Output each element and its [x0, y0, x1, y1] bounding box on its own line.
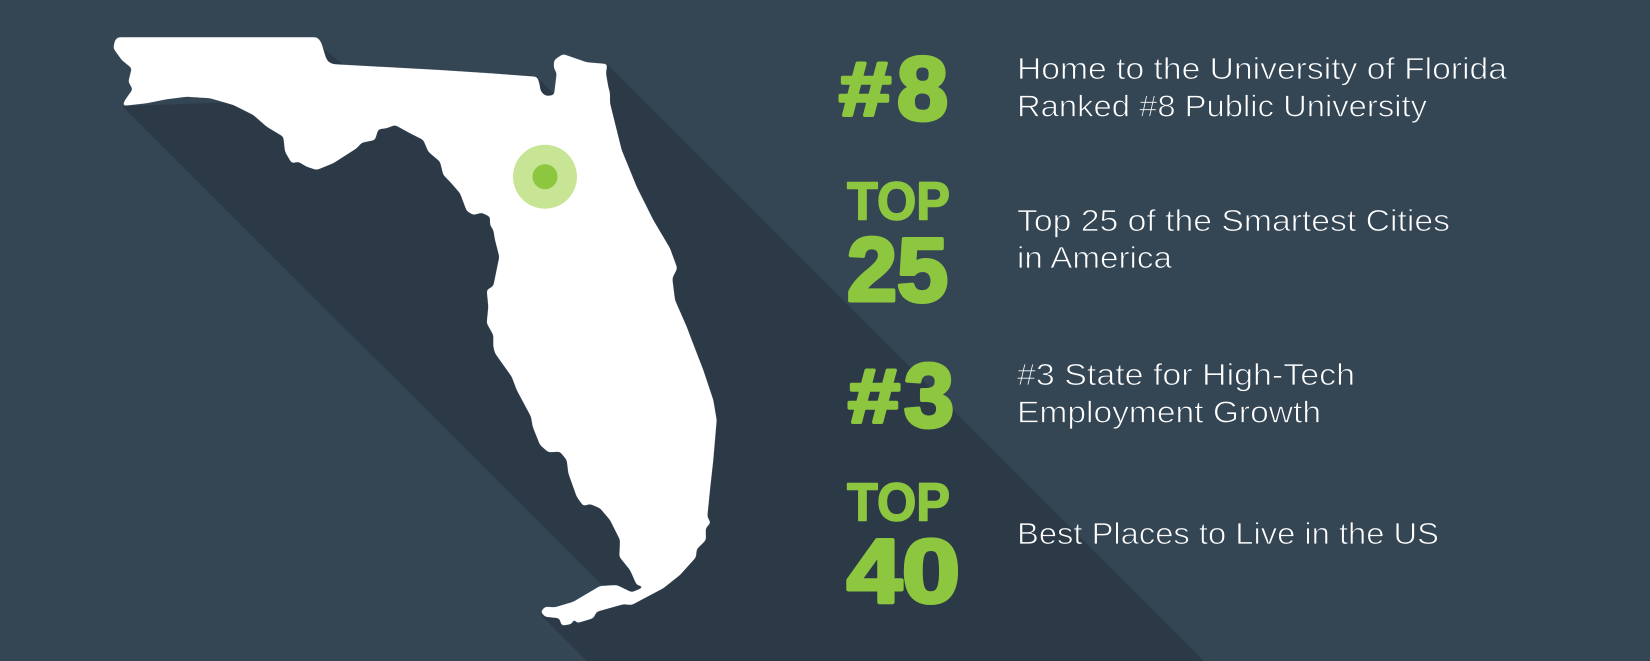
stat: #8: #: [839, 47, 891, 132]
text: Smartest Cities: Top 25 of the Smartest Cities: [1017, 203, 1450, 238]
stat: Top 25: 2: [847, 220, 897, 320]
text: High-Tech Employment: Employment Growth: [1017, 395, 1321, 430]
text: High-Tech Employment: [1017, 357, 1355, 430]
stat: Top 40: 0: [902, 522, 960, 622]
text: Smartest Cities: [1017, 203, 1450, 275]
stat: #3: [848, 346, 954, 446]
stat: Top 25: [847, 172, 950, 321]
stat: Top 40: 4: [847, 522, 902, 622]
long diagonal shadow of the map: [122, 48, 1204, 661]
stat: #3: #: [848, 354, 900, 439]
text: University of Florida: Home to the University of Florida: [1017, 51, 1508, 86]
stat: #3: 3: [904, 346, 954, 446]
text: University of Florida: [1017, 51, 1508, 124]
location marker: Gainesville: [513, 145, 577, 209]
stat: Top 25: TOP: [847, 172, 950, 232]
text: University of Florida: Ranked #8 Public University: [1017, 89, 1428, 124]
stat: #8: 8: [897, 40, 948, 140]
stat: Top 40: TOP: [847, 472, 950, 532]
text: High-Tech Employment: #3 State for High-Tech: [1017, 357, 1355, 392]
text: Smartest Cities: in America: [1017, 240, 1173, 275]
stat: #8: [839, 40, 948, 140]
text: Best Places: Best Places to Live in the US: [1017, 516, 1439, 551]
Florida state map: [113, 37, 717, 626]
stat: Top 25: 5: [897, 221, 948, 321]
stat: Top 40: [847, 472, 960, 622]
